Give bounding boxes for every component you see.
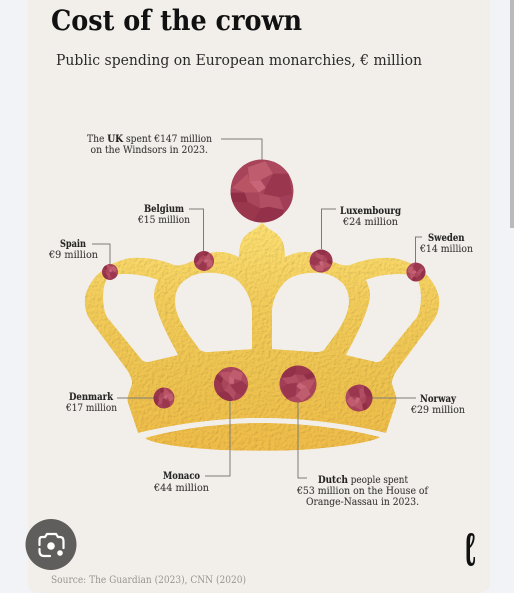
gem: Norway <box>342 381 376 415</box>
icon: lens button <box>26 519 76 570</box>
source: Source: The Guardian (2023), CNN (2020) <box>51 574 246 586</box>
leader lines <box>92 139 422 478</box>
subtitle: Public spending on European monarchies, € million <box>56 51 422 69</box>
gem: Monaco <box>207 360 255 408</box>
title: Cost of the crown <box>51 4 302 37</box>
label: Monaco: €44 million <box>153 482 209 494</box>
gem: UK <box>230 160 294 222</box>
gem: Belgium <box>190 247 218 275</box>
label: Norway: Norway <box>420 393 457 405</box>
label: Norway: €29 million <box>410 404 465 416</box>
crown illustration <box>85 222 439 451</box>
gem: Denmark <box>154 388 174 408</box>
label: Netherlands: Orange-Nassau in 2023. <box>306 496 419 508</box>
label: Norway <box>410 393 465 416</box>
label: Belgium: €15 million <box>137 214 190 226</box>
crown brim <box>145 423 380 451</box>
label: UK: The UK spent €147 million <box>87 133 212 145</box>
label: Belgium: Belgium <box>144 203 184 215</box>
label: Denmark: Denmark <box>69 391 114 403</box>
label: Netherlands: €53 million on the House of <box>296 485 429 497</box>
label: Luxembourg: Luxembourg <box>340 205 402 217</box>
label: Monaco <box>153 470 209 494</box>
crown body <box>85 222 439 433</box>
label: Belgium <box>137 203 190 226</box>
gem: Spain <box>99 261 121 283</box>
gem: Sweden <box>403 259 429 285</box>
label: UK: on the Windsors in 2023. <box>90 144 208 156</box>
label: Monaco: Monaco <box>163 470 200 482</box>
label: Sweden: Sweden <box>428 232 465 244</box>
label: Luxembourg: €24 million <box>342 216 398 228</box>
label: UK <box>87 133 212 156</box>
gem: Luxembourg <box>306 246 336 276</box>
label: Denmark <box>65 391 117 414</box>
label: Sweden: €14 million <box>419 243 473 255</box>
scrollbar <box>510 0 514 228</box>
label: Denmark: €17 million <box>65 402 117 414</box>
label: Spain: €9 million <box>48 249 98 261</box>
icon: publisher logo <box>466 533 475 566</box>
label: Sweden <box>419 232 473 255</box>
gem: Netherlands <box>274 360 322 408</box>
label: Netherlands: Dutch people spent <box>318 474 409 486</box>
label: Netherlands <box>296 474 429 508</box>
label: Spain: Spain <box>60 238 86 250</box>
label: Spain <box>48 238 98 261</box>
label: Luxembourg <box>340 205 402 228</box>
